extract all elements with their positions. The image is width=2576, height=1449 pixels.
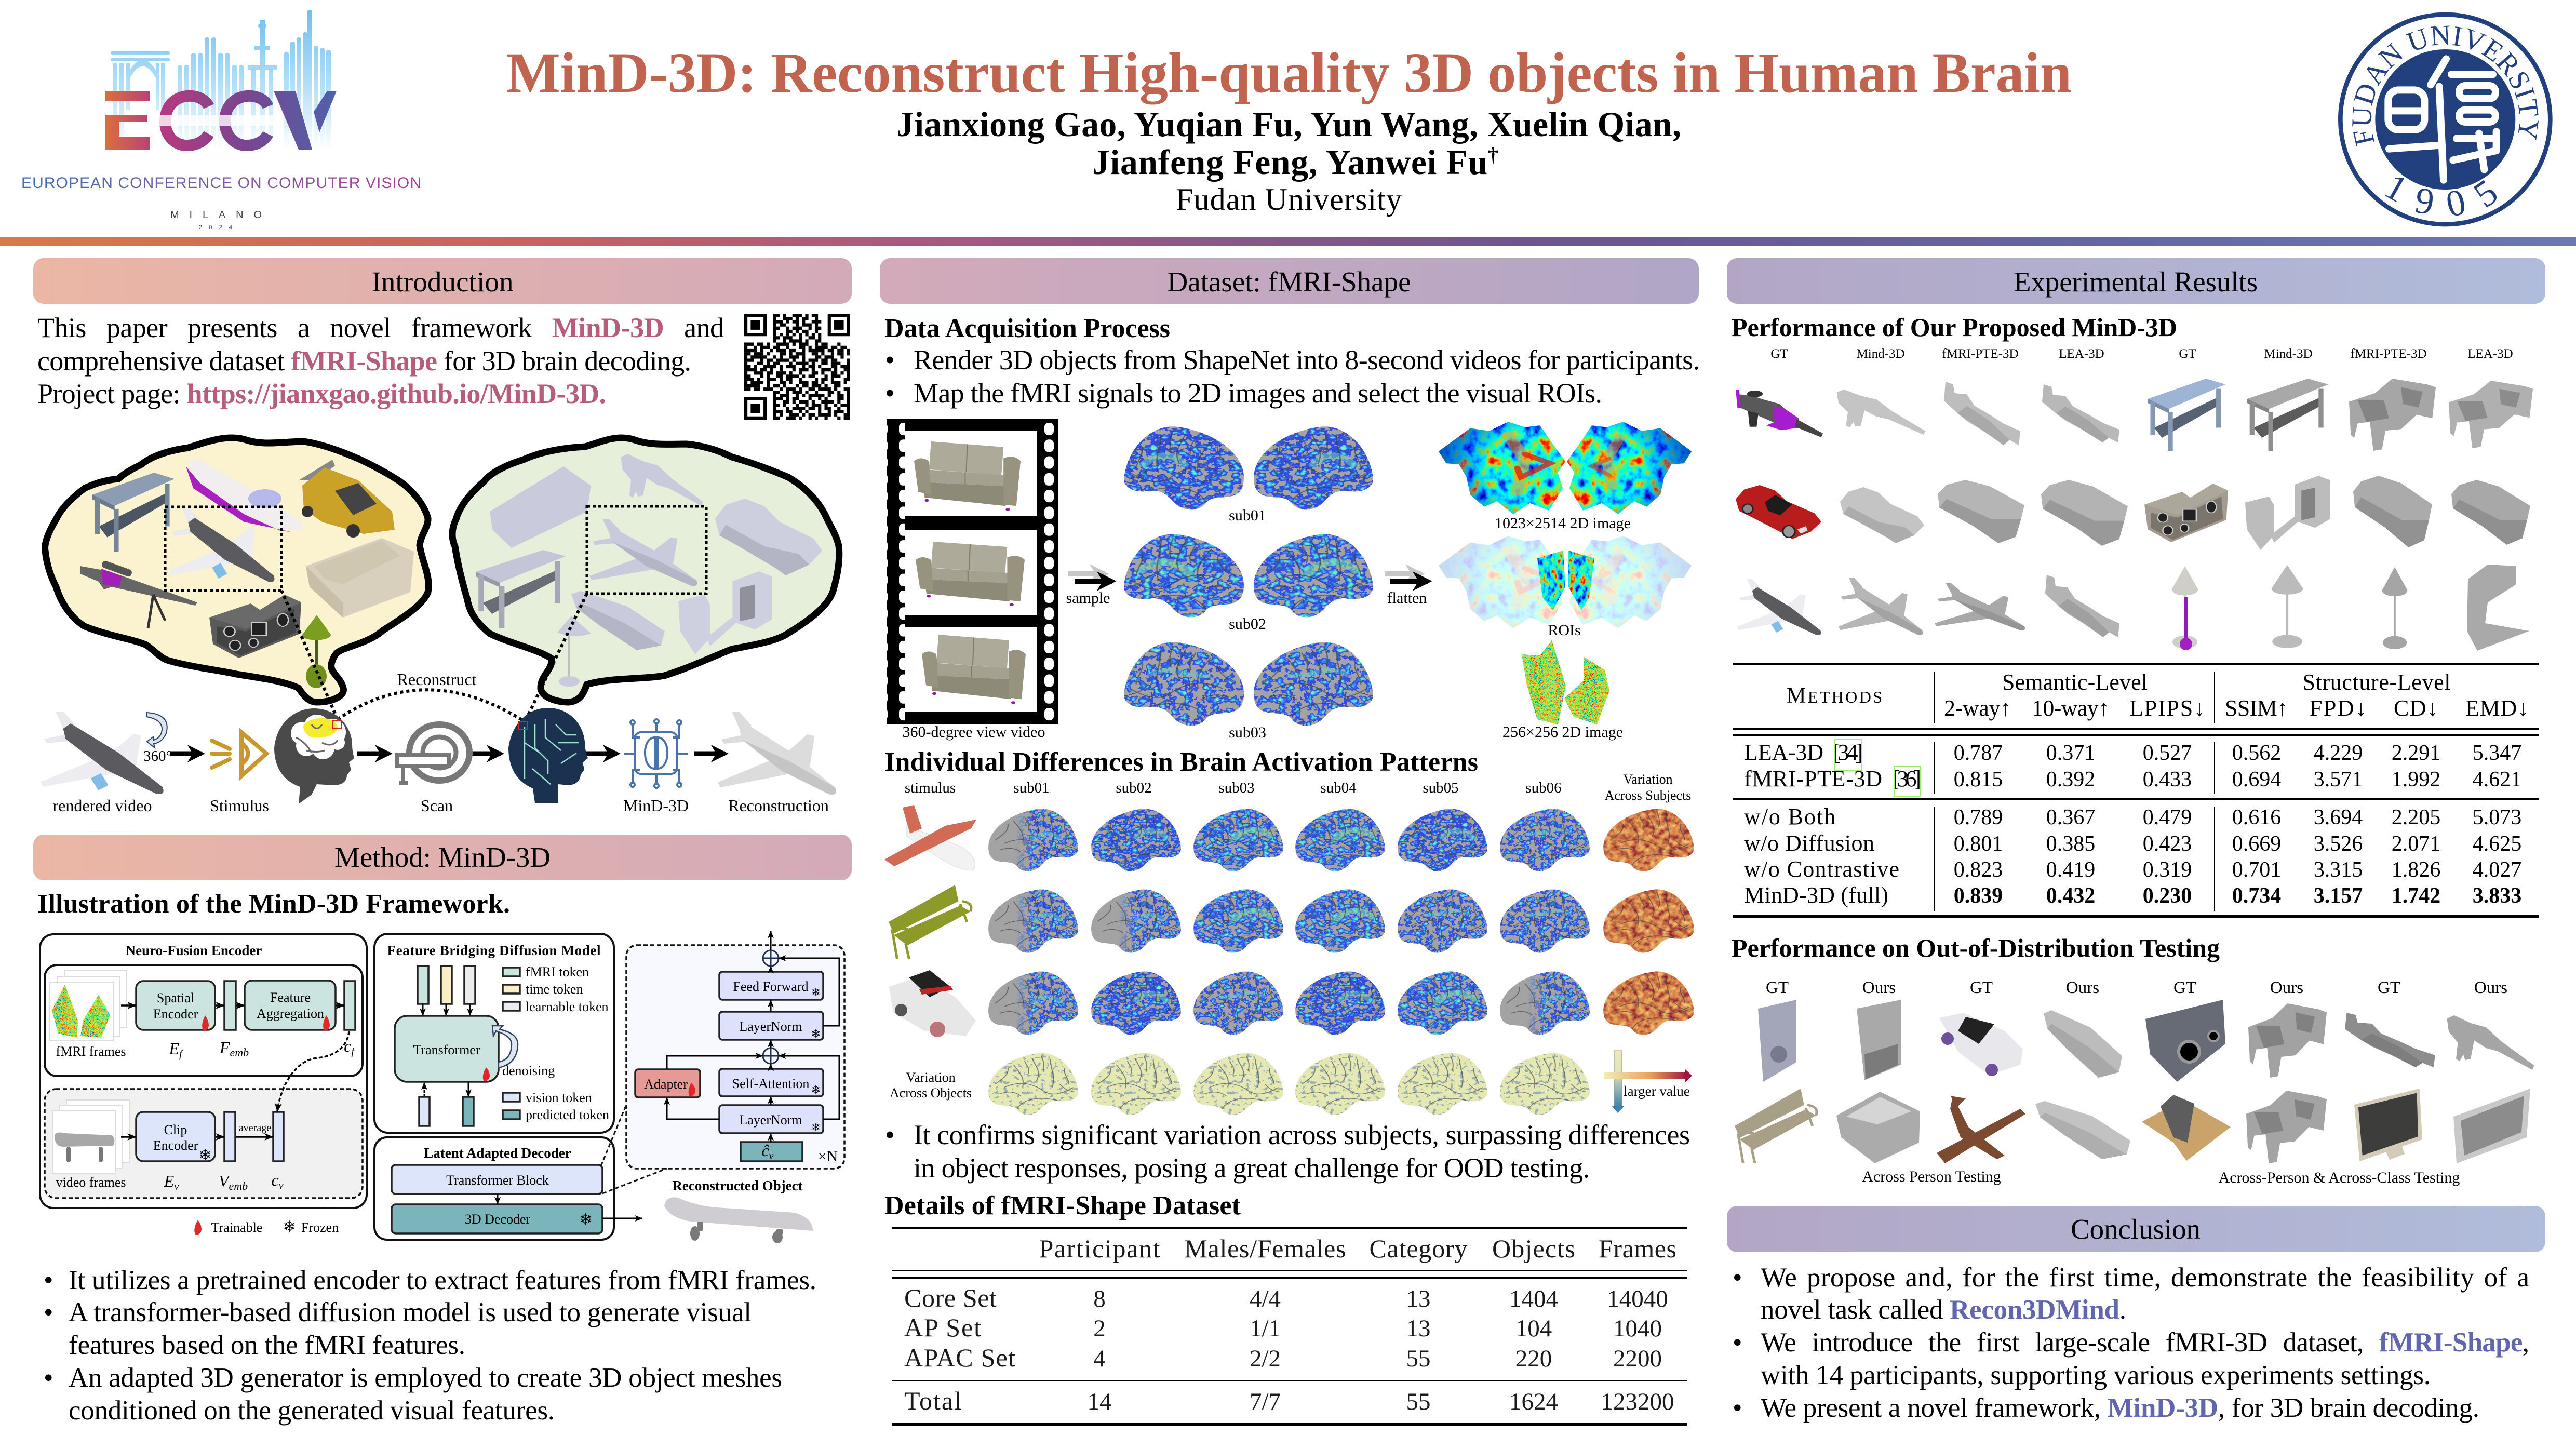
method bullets: • [44,1297,53,1327]
icon: eye stimulus [212,732,266,776]
heading: Introduction: Introduction [372,266,513,298]
thought cloud: reconstructed objects [452,438,839,702]
table: metrics: 1.742 [2392,884,2440,908]
conclusion bullets: We present a novel framework, MinD-3D, for 3D brain decoding. [1761,1393,2479,1423]
flat maps: 256×256 2D image [1502,723,1623,741]
method bullets: • [44,1265,53,1295]
column labels: sub01 [1013,780,1050,796]
variation bullet: It confirms significant variation across subjects, surpassing differences [914,1119,1690,1150]
table: fMRI-Shape dataset: 13 [1406,1285,1430,1312]
block: Feature Bridging Diffusion Model: Transformer [413,1042,480,1057]
reconstructed object: skateboard: Reconstructed Object [672,1178,803,1193]
subheading: dataset details: Details of fMRI-Shape Dataset [884,1191,1241,1220]
table: metrics: 10-way↑ [2032,695,2110,721]
heading: Experimental Results [1727,258,2545,304]
table: metrics: 2.205 [2392,806,2440,829]
block: transformer detail: ❄ [811,1121,821,1134]
table: metrics: Semantic-Level [2002,669,2148,695]
block: Neuro-Fusion Encoder: Aggregation [257,1006,324,1021]
film strip with sofa frames [884,419,1058,741]
column labels: LEA-3D [2467,347,2513,361]
figure: brain activation grid [884,772,1694,1115]
table: metrics: 3.157 [2314,884,2363,908]
title: MinD-3D: Reconstruct High-quality 3D objects in Human Brain [506,41,2072,104]
table: metrics: 0.787 [1954,741,2003,765]
block: Neuro-Fusion Encoder: E [169,1039,179,1058]
block: Neuro-Fusion Encoder: Neuro-Fusion Encoder [126,943,262,958]
flat maps: ROIs [1548,622,1581,639]
logo: Fudan University seal: 1905 [2385,178,2497,216]
table: metrics: 1.992 [2392,768,2440,791]
brain surfaces sub01-sub03: sub01 [1229,507,1266,524]
pipeline labels: Reconstruction [728,796,829,815]
pipeline arrows [170,751,725,756]
block: Feature Bridging Diffusion Model [374,934,614,1133]
subheading: out-of-distribution: Performance on Out-of-Distribution Testing [1732,933,2220,962]
table: metrics: 0.669 [2232,832,2281,856]
table: metrics: 0.371 [2046,741,2095,765]
header gradient bar [0,237,2576,246]
table: fMRI-Shape dataset: 104 [1515,1315,1552,1342]
block: Latent Adapted Decoder [374,1137,642,1240]
row label: variation across objects: Across Objects [890,1085,972,1101]
logo: Fudan University seal: FUDAN UNIVERSITY [2352,26,2539,146]
block: Latent Adapted Decoder: 3D Decoder [465,1212,531,1227]
table: fMRI-Shape dataset: 14 [1088,1388,1111,1415]
block: transformer detail: Adapter [644,1077,688,1092]
block: Neuro-Fusion Encoder: c [344,1037,351,1055]
object comparison grid [1736,379,2533,651]
heading: Introduction [33,258,852,304]
row label: variation across objects [890,1070,972,1101]
token legend: learnable token [526,999,609,1014]
thought cloud: original objects [45,438,428,702]
table: fMRI-Shape dataset: 4 [1093,1345,1106,1372]
table: metrics: [34] [1833,740,1863,765]
table: metrics: 0.701 [2232,858,2281,882]
table: fMRI-Shape dataset: Frames [1599,1234,1676,1263]
heading: Method [33,835,852,880]
colour scale key: larger value [1624,1083,1690,1099]
table: metrics: MinD-3D (full) [1744,882,1888,908]
table: metrics: 5.347 [2473,741,2521,765]
logo: ECCV Milano 2024 [21,10,421,231]
variation bullet: in object responses, posing a great challenge for OOD testing. [914,1152,1590,1184]
brain surfaces sub01-sub03: sub02 [1229,615,1266,633]
pipeline labels: Stimulus [210,796,269,815]
block: Neuro-Fusion Encoder: emb [230,1046,249,1059]
icon: MRI scanner [397,725,469,783]
conclusion bullets: novel task called Recon3DMind. [1761,1295,2126,1325]
block: Neuro-Fusion Encoder: v [174,1181,179,1192]
token legend: predicted token [526,1107,609,1122]
variation bullet: • [885,1119,895,1150]
OOD labels: GT [2378,978,2400,997]
table: metrics: FPD↓ [2310,695,2367,721]
authors: † [1488,143,1498,166]
block: transformer detail: v [769,1150,774,1162]
panel: method [33,835,852,1426]
heading: Dataset: Dataset: fMRI-Shape [1168,266,1411,298]
table: fMRI-Shape dataset: Participant [1039,1234,1160,1263]
table: metrics: 2.071 [2392,832,2440,856]
video branch [45,1089,363,1198]
block: Neuro-Fusion Encoder: Encoder [153,1138,198,1153]
table: metrics: SSIM↑ [2225,695,2288,721]
film strip with sofa frames: 360-degree view video [903,723,1045,741]
block: Neuro-Fusion Encoder: emb [229,1179,248,1192]
legend: trainable and frozen: Frozen [301,1220,339,1235]
pipeline labels: Scan [421,796,453,815]
block: Neuro-Fusion Encoder: V [219,1172,229,1190]
stimulus: plane [884,805,976,870]
fMRI frames stack [50,970,127,1041]
block: Latent Adapted Decoder: Transformer Block [446,1173,549,1188]
column labels [905,772,1691,803]
column labels: Variation [1623,772,1673,787]
acquisition bullets: • [885,344,895,375]
column labels: sub06 [1525,780,1562,796]
table: metrics: 0.423 [2143,832,2192,856]
table: fMRI-Shape dataset: Males/Females [1184,1234,1346,1263]
method bullets: A transformer-based diffusion model is used to generate visual [69,1297,752,1327]
subheading: data acquisition: Data Acquisition Process [884,314,1170,343]
table: fMRI-Shape dataset [892,1227,1687,1426]
pipeline labels: rendered video [52,796,152,815]
table: fMRI-Shape dataset: Core Set [904,1283,997,1312]
block: transformer detail: ×N [818,1148,838,1165]
table: metrics: 0.801 [1954,832,2003,856]
conclusion bullets [1733,1263,2529,1423]
table: metrics: 1.826 [2392,858,2440,882]
OOD labels: GT [1970,978,1993,997]
acquisition bullets: Map the fMRI signals to 2D images and select the visual ROIs. [914,378,1602,409]
figure: acquisition pipeline [884,419,1692,741]
icon: head with brain [274,708,354,804]
icon: MinD-3D chip [624,719,688,788]
table: metrics: 3.833 [2473,884,2521,908]
table: metrics: 3.571 [2314,768,2363,791]
OOD object grid [1735,1000,2534,1163]
token legend: vision token [526,1090,592,1105]
column labels: GT [2179,347,2196,361]
table: metrics: 0.230 [2143,884,2192,908]
table: metrics: 0.479 [2143,806,2192,829]
OOD labels: Ours [2066,978,2099,997]
subheading: individual differences: Individual Differences in Brain Activation Patterns [884,747,1478,777]
column labels: sub03 [1218,780,1255,796]
token legend: fMRI token [526,964,589,980]
table: metrics: 0.527 [2143,741,2192,765]
table: metrics: 0.392 [2046,768,2095,791]
block: Neuro-Fusion Encoder: video frames [56,1175,126,1190]
table: fMRI-Shape dataset: 1404 [1509,1285,1558,1312]
table: fMRI-Shape dataset: 220 [1515,1345,1552,1372]
table: metrics: 0.839 [1954,884,2003,908]
table: fMRI-Shape dataset: Category [1369,1234,1468,1263]
flames and snowflake marks [202,1015,330,1031]
table: fMRI-Shape dataset: 14040 [1607,1285,1668,1312]
OOD labels [1766,978,2507,997]
colour scale key [1604,1051,1692,1113]
column labels: Across Subjects [1605,788,1691,803]
table: metrics: w/o Both [1744,804,1835,829]
reconstruction plane [718,712,836,795]
method bullets: • [44,1363,53,1393]
heading: Method: Method: MinD-3D [334,841,551,873]
column labels: GT [1770,347,1788,361]
OOD captions: Across Person Testing [1862,1168,2001,1185]
conclusion bullets: We propose and, for the first time, demonstrate the feasibility of a [1761,1263,2529,1293]
block: transformer detail: ❄ [811,1084,821,1097]
pipeline labels: MinD-3D [623,796,689,815]
table: metrics: 5.073 [2473,806,2521,829]
pipeline labels: Reconstruct [397,670,477,689]
block: Neuro-Fusion Encoder: Encoder [153,1007,198,1022]
row label: variation across objects: Variation [906,1070,956,1085]
table: metrics: 4.229 [2314,741,2363,765]
table: metrics: 4.027 [2473,858,2521,882]
table: metrics: CD↓ [2394,695,2438,721]
conclusion bullets: • [1733,1263,1742,1293]
table: metrics: LEA-3D [1744,740,1823,765]
OOD labels: Ours [1862,978,1896,997]
conclusion bullets: • [1733,1327,1742,1358]
authors [896,105,1681,182]
flat maps: 1023×2514 2D image [1495,515,1631,532]
OOD captions: Across-Person & Across-Class Testing [2219,1169,2460,1186]
column labels: stimulus [905,780,956,796]
table: metrics: 0.385 [2046,832,2095,856]
table: fMRI-Shape dataset: AP Set [904,1313,981,1342]
diagram: MinD-3D framework [40,931,844,1243]
table: metrics: METHODS [1787,684,1882,708]
icon: circuit head [508,708,588,803]
acquisition bullets [885,344,1700,409]
heading: Experimental Results: Experimental Results [2014,266,2258,298]
table: fMRI-Shape dataset: 13 [1406,1315,1430,1342]
block: Neuro-Fusion Encoder: f [179,1049,183,1060]
OOD labels: Ours [2270,978,2303,997]
column labels [1770,347,2513,361]
variation bullet [885,1119,1690,1184]
heading: Conclusion [1727,1206,2545,1252]
table: fMRI-Shape dataset: 2200 [1613,1345,1662,1372]
table: metrics: 0.433 [2143,768,2192,791]
block: transformer detail [601,931,844,1193]
flat maps [1439,422,1692,741]
intro text: Project page: https://jianxgao.github.io/MinD-3D. [37,378,606,409]
OOD captions [1862,1168,2460,1186]
affiliation: Fudan University [1176,182,1402,217]
table: fMRI-Shape dataset: APAC Set [904,1343,1015,1372]
method bullets: It utilizes a pretrained encoder to extract features from fMRI frames. [69,1265,816,1295]
block: Neuro-Fusion Encoder: v [279,1180,284,1191]
heading: Conclusion: Conclusion [2071,1213,2201,1245]
logo: Fudan University seal [2338,12,2553,226]
reconstructed object: skateboard [664,1178,813,1243]
OOD labels: Ours [2474,978,2507,997]
table: fMRI-Shape dataset: 1624 [1509,1388,1558,1415]
table: metrics: 0.319 [2143,858,2192,882]
stimulus plane with 360 arrow: 360° [143,748,172,764]
column labels: fMRI-PTE-3D [2350,347,2427,361]
column labels: sub05 [1423,780,1459,796]
block: Neuro-Fusion Encoder: E [164,1172,174,1190]
subheading: performance: Performance of Our Proposed MinD-3D [1732,313,2177,342]
column labels: LEA-3D [2059,347,2104,361]
block: transformer detail: LayerNorm [739,1019,802,1034]
block: Neuro-Fusion Encoder: F [220,1038,230,1057]
table: fMRI-Shape dataset: 1/1 [1250,1315,1281,1342]
table: fMRI-Shape dataset: Objects [1492,1234,1575,1263]
column labels: fMRI-PTE-3D [1942,347,2019,361]
panel: experimental results [1727,258,2545,1186]
block: transformer detail: LayerNorm [739,1112,802,1128]
method bullets: An adapted 3D generator is employed to create 3D object meshes [69,1363,782,1393]
table: fMRI-Shape dataset: 7/7 [1250,1388,1281,1415]
block: Neuro-Fusion Encoder: c [271,1171,279,1189]
column labels: sub04 [1320,780,1357,796]
table: metrics: 4.625 [2473,832,2521,856]
block: Neuro-Fusion Encoder: Clip [164,1122,187,1137]
block: Feature Bridging Diffusion Model: denoising [502,1063,555,1078]
table: fMRI-Shape dataset: 123200 [1601,1388,1674,1415]
block: Neuro-Fusion Encoder: average [239,1122,271,1134]
table: fMRI-Shape dataset: Total [904,1386,961,1415]
panel: dataset [880,258,1700,1426]
table: metrics: 0.367 [2046,806,2095,829]
stimulus: bench [889,885,971,959]
method bullets: features based on the fMRI features. [69,1330,465,1360]
table: metrics: 0.789 [1954,806,2003,829]
table: metrics: 3.526 [2314,832,2363,856]
column labels: sub02 [1116,780,1152,796]
intro text: comprehensive dataset fMRI-Shape for 3D brain decoding. [37,345,691,377]
stimulus plane with 360 arrow [41,712,172,794]
column labels: Mind-3D [2264,347,2313,361]
block: Neuro-Fusion Encoder: f [351,1046,355,1057]
intro text: This paper presents a novel framework MinD-3D and [37,312,724,343]
table: fMRI-Shape dataset: 4/4 [1250,1285,1281,1312]
sample and flatten arrows: sample [1066,589,1110,607]
acquisition bullets: • [885,378,895,409]
block: Feature Bridging Diffusion Model: Feature Bridging Diffusion Model [387,943,601,958]
block: Latent Adapted Decoder: Latent Adapted Decoder [424,1145,571,1161]
conclusion bullets: We introduce the first large-scale fMRI-3D dataset, fMRI-Shape, [1761,1327,2529,1358]
logo: ECCV Milano 2024: 2024 [199,224,232,231]
block: Neuro-Fusion Encoder: ❄ [198,1146,212,1164]
method bullets: conditioned on the generated visual features. [69,1396,555,1426]
logo: ECCV Milano 2024: EUROPEAN CONFERENCE ON COMPUTER VISION [21,175,421,192]
conclusion bullets: • [1733,1393,1742,1423]
method bullets [44,1265,816,1426]
table: metrics: Structure-Level [2303,669,2450,695]
intro text [37,312,724,409]
header: logos, title and authors [0,10,2576,246]
legend: trainable and frozen: Trainable [211,1220,262,1235]
table: metrics: 0.562 [2232,741,2281,765]
table: metrics: 3.694 [2314,806,2363,829]
panel: conclusion [1727,1206,2545,1423]
block: Neuro-Fusion Encoder [40,934,367,1208]
block: transformer detail: Feed Forward [733,979,809,994]
figure: thought clouds and reconstruction pipeline [41,438,839,815]
table: metrics: w/o Contrastive [1744,856,1899,882]
QR code [744,314,850,420]
token legend [503,964,609,1122]
table: metrics: 0.815 [1954,768,2003,791]
table: metrics: LPIPS↓ [2129,695,2205,721]
table: metrics: 4.621 [2473,768,2521,791]
authors: Jianxiong Gao, Yuqian Fu, Yun Wang, Xuelin Qian, [896,105,1681,144]
block: transformer detail: ❄ [811,986,821,999]
table: fMRI-Shape dataset: 2/2 [1250,1345,1281,1372]
table: metrics: 3.315 [2314,858,2363,882]
table: fMRI-Shape dataset: 55 [1406,1345,1430,1372]
OOD labels: GT [2174,978,2196,997]
legend: trainable and frozen: ❄ [283,1218,296,1236]
table: metrics: 0.694 [2232,768,2281,791]
table: metrics: [36] [1893,766,1921,791]
table: fMRI-Shape dataset: 2 [1093,1315,1106,1342]
table: metrics: fMRI-PTE-3D [1744,766,1882,791]
table: fMRI-Shape dataset: 1040 [1613,1315,1662,1342]
acquisition bullets: Render 3D objects from ShapeNet into 8-second videos for participants. [914,344,1700,375]
subheading: framework: Illustration of the MinD-3D Framework. [37,889,510,919]
table: metrics: 0.823 [1954,858,2003,882]
pipeline labels [52,670,829,815]
column labels: Mind-3D [1856,347,1905,361]
table: metrics: 0.734 [2232,884,2281,908]
sample and flatten arrows [1066,574,1428,607]
block: transformer detail: ❄ [811,1028,821,1041]
token legend: time token [526,982,583,997]
block: transformer detail: Self-Attention [732,1076,809,1091]
table: metrics: 2-way↑ [1944,695,2011,721]
block: Neuro-Fusion Encoder: fMRI frames [56,1044,126,1059]
table: fMRI-Shape dataset: 55 [1406,1388,1430,1415]
table: metrics: 0.419 [2046,858,2095,882]
table: fMRI-Shape dataset: 8 [1093,1285,1106,1312]
block: Neuro-Fusion Encoder: Spatial [157,990,194,1005]
table: metrics: 0.432 [2046,884,2095,908]
stimulus: race car [889,970,976,1037]
OOD labels: GT [1766,978,1789,997]
heading: Dataset [880,258,1699,304]
block: Neuro-Fusion Encoder: Feature [270,990,311,1005]
conclusion bullets: with 14 participants, supporting various experiments settings. [1761,1360,2431,1390]
brain surfaces sub01-sub03 [1124,426,1373,741]
table: metrics: 0.616 [2232,806,2281,829]
logo: ECCV Milano 2024: MILANO [170,209,262,221]
panel: introduction [33,258,852,815]
table: metrics: EMD↓ [2465,695,2529,721]
sample and flatten arrows: flatten [1387,589,1427,607]
brain surfaces sub01-sub03: sub03 [1229,724,1266,741]
brain grid rows [988,809,1694,1115]
block: transformer detail: ĉ [761,1141,769,1160]
legend: trainable and frozen [194,1218,339,1236]
authors: Jianfeng Feng, Yanwei Fu [1092,143,1487,182]
table: metrics: 2.291 [2392,741,2440,765]
table: metrics [1733,663,2539,918]
block: Latent Adapted Decoder: ❄ [579,1211,593,1229]
dotted connectors [281,591,587,721]
table: metrics: w/o Diffusion [1744,830,1874,856]
